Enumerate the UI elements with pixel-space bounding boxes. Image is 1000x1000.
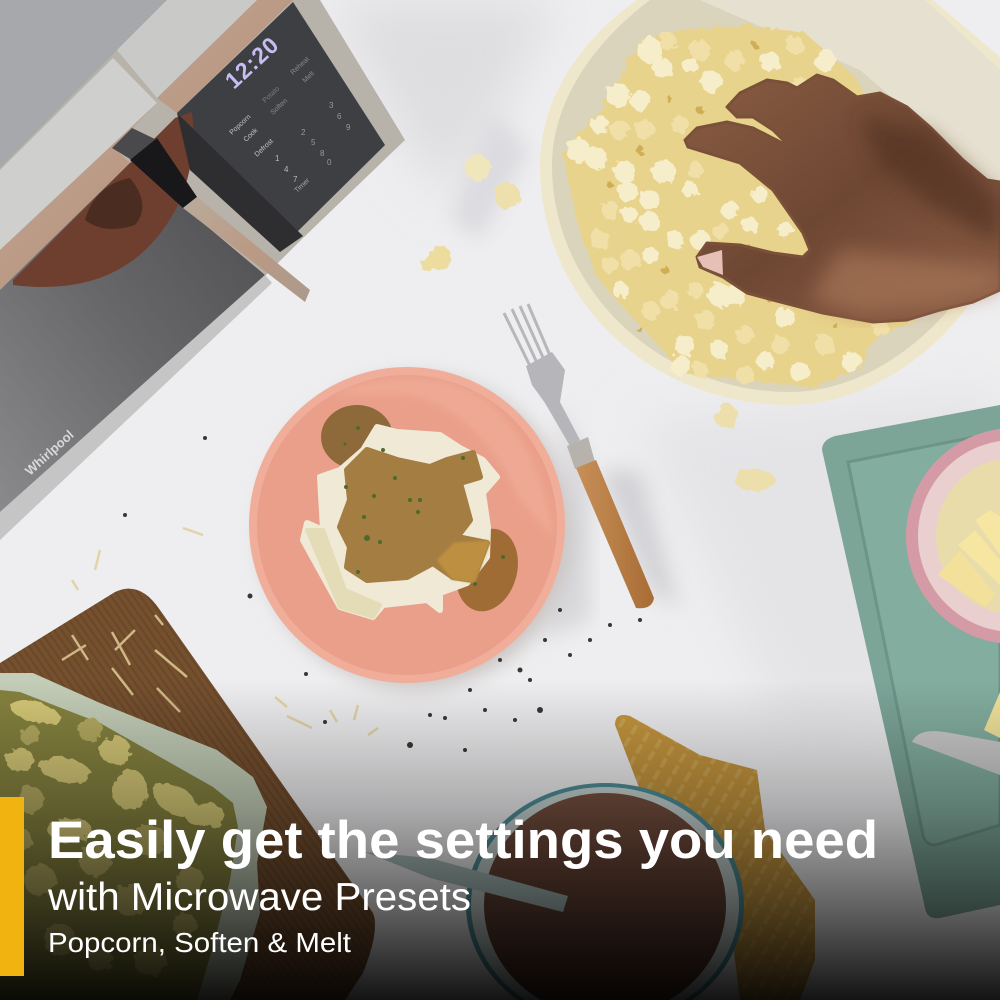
accent bar — [0, 797, 24, 976]
control panel: 0 — [327, 158, 332, 167]
control panel: Potato — [262, 85, 281, 104]
cutting board — [822, 405, 1000, 918]
control panel — [177, 2, 385, 232]
board parmesan — [62, 615, 187, 712]
microwave — [0, 0, 405, 540]
caption — [47, 811, 878, 958]
parsley — [344, 426, 505, 586]
control panel: 12:20 — [220, 31, 284, 94]
control panel: 5 — [311, 138, 316, 147]
microwave top — [0, 0, 167, 168]
door silver edge — [0, 275, 272, 540]
control panel: Melt — [302, 70, 316, 84]
gravy pools — [321, 405, 393, 469]
control panel: Reheat — [290, 56, 311, 76]
control panel: Defrost — [254, 138, 275, 158]
door mirror panel — [177, 113, 303, 252]
brand text: Whirlpool — [22, 427, 77, 478]
mustard towel — [615, 715, 815, 1000]
chocolate bowl — [365, 783, 744, 1000]
butter piece — [984, 692, 1000, 738]
control panel: 6 — [337, 112, 342, 121]
pepper specks — [123, 436, 642, 752]
spoon handle — [365, 852, 568, 912]
butter bowl — [906, 428, 1000, 644]
control panel: 2 — [301, 128, 306, 137]
microwave front trim — [0, 58, 157, 250]
control panel: 1 — [275, 154, 280, 163]
control panel: Timer — [294, 177, 312, 194]
gravy — [340, 450, 487, 580]
fork — [504, 304, 654, 608]
control panel: Soften — [270, 97, 289, 116]
pasta dish — [0, 673, 267, 1000]
plate reflection in window — [13, 112, 193, 287]
thumbnail — [697, 250, 723, 275]
subheading: with Microwave Presets — [47, 876, 471, 919]
control panel: 9 — [346, 123, 351, 132]
microwave stainless edge — [0, 0, 405, 540]
microwave upper trim — [117, 0, 257, 98]
control panel: 4 — [284, 165, 289, 174]
door window — [0, 163, 265, 512]
plate with mashed potatoes — [249, 367, 572, 688]
hand shadow — [860, 115, 1000, 245]
control panel: Cook — [243, 127, 260, 143]
popcorn — [562, 25, 930, 387]
control panel: 3 — [329, 101, 334, 110]
control panel: 7 — [293, 175, 298, 184]
hand — [685, 75, 1000, 322]
door handle — [112, 128, 310, 302]
dark bottom gradient — [0, 680, 1000, 1000]
popcorn bowl — [540, 0, 1000, 405]
spilled popcorn pieces — [421, 155, 775, 491]
hand highlight — [810, 250, 1000, 315]
mashed potato — [303, 427, 497, 617]
headline: Easily get the settings you need — [48, 811, 878, 870]
control panel: 8 — [320, 149, 325, 158]
preset list: Popcorn, Soften & Melt — [48, 927, 351, 958]
wooden board — [0, 589, 375, 1000]
knife — [912, 731, 1000, 775]
microwave copper-reflecting trim — [0, 0, 293, 290]
fusilli — [6, 696, 225, 976]
parmesan shreds — [72, 528, 378, 735]
control panel: Popcorn — [229, 113, 253, 136]
